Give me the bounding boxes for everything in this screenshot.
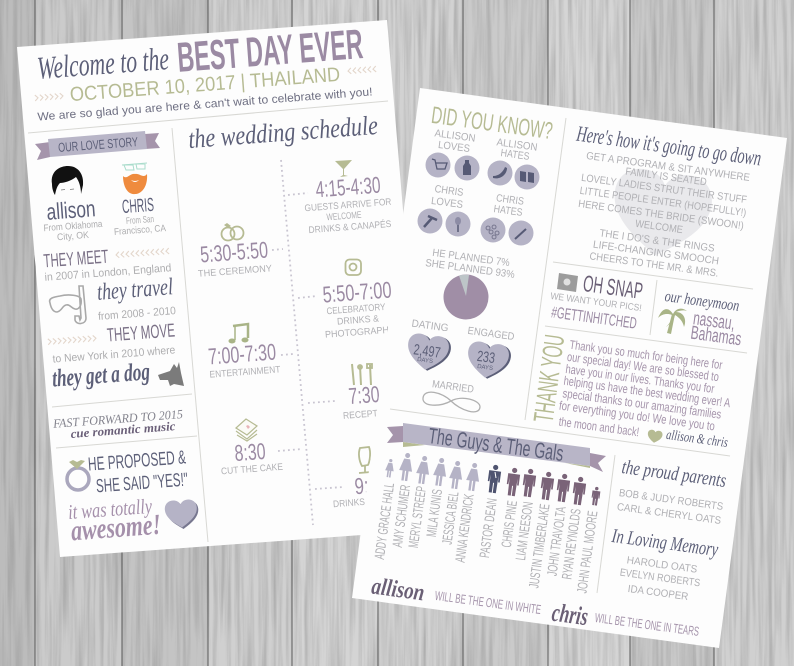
icon: heart bbox=[164, 499, 200, 530]
groomsmen pictograms bbox=[505, 467, 601, 506]
schedule item: 7:30 reception: 7:30 bbox=[348, 381, 380, 409]
chris loves: LOVES bbox=[430, 195, 464, 211]
schedule item: 8:30 cut the cake: CUT THE CAKE bbox=[221, 462, 283, 477]
engaged heart: ENGAGED bbox=[467, 325, 515, 343]
fast forward: FAST FORWARD TO 2015 bbox=[52, 407, 183, 431]
icon: groom glasses and beard bbox=[122, 163, 147, 194]
schedule item: 7:00-7:30 bbox=[207, 324, 293, 381]
thank you note: Thank you so much for being here for bbox=[569, 338, 723, 372]
thank you note: for everything you do! We love you to bbox=[558, 399, 716, 433]
allison hates: HATES bbox=[500, 147, 530, 163]
schedule item: 5:30-5:50 bbox=[198, 223, 283, 280]
planned percentages: SHE PLANNED 93% bbox=[425, 257, 515, 281]
heading: did you know: DID YOU KNOW? bbox=[430, 102, 554, 145]
married infinity: MARRIED bbox=[431, 378, 475, 396]
date and location: OCTOBER 10, 2017 | THAILAND bbox=[69, 64, 341, 106]
schedule item: 7:00-7:30: 7:00-7:30 bbox=[207, 338, 277, 370]
order of ceremony list bbox=[577, 150, 751, 280]
heading: welcome to the: Welcome to the bbox=[36, 40, 170, 86]
cue romantic music: cue romantic music bbox=[70, 419, 176, 441]
wedding party names: JOHN TRAVOLTA bbox=[544, 505, 569, 577]
in 2007: in 2007 in London, England bbox=[44, 262, 172, 284]
chevrons bbox=[116, 248, 169, 258]
it was totally awesome bbox=[67, 494, 162, 547]
bride name: City, OK bbox=[57, 230, 90, 243]
they travel: they travel bbox=[96, 274, 174, 306]
thank you note: helping us have the best wedding ever! A bbox=[563, 374, 732, 410]
schedule item: 9:00 drinks: 9:00 bbox=[354, 471, 388, 499]
groom name: Francisco, CA bbox=[114, 223, 167, 238]
schedule item: 7:30 reception: RECEPTION bbox=[343, 407, 393, 422]
dating heart: 2,497 bbox=[412, 341, 442, 362]
icon: palm tree bbox=[658, 309, 687, 334]
order of ceremony list: CHEERS TO THE MR. & MRS. bbox=[589, 250, 719, 280]
chris hates: HATES bbox=[493, 203, 523, 219]
schedule item: 7:00-7:30: ENTERTAINMENT bbox=[209, 364, 281, 381]
heading: in loving memory: In Loving Memory bbox=[610, 525, 720, 561]
schedule item: 5:50-7:00: DRINKS & bbox=[337, 313, 380, 328]
thank you note bbox=[558, 338, 732, 439]
chevrons bbox=[48, 335, 96, 345]
allison hates bbox=[488, 136, 540, 190]
wedding party names: AMY SCHUMER bbox=[389, 484, 413, 548]
schedule item: 4:15-4:30: GUESTS ARRIVE FOR bbox=[304, 197, 392, 214]
groom name: From San bbox=[126, 214, 154, 227]
parents names: BOB & JUDY ROBERTS bbox=[618, 487, 724, 513]
icon: faint heart bbox=[607, 165, 715, 262]
schedule item: 4:15-4:30 bbox=[288, 160, 392, 236]
wedding party names: ADDY GRACE HALL bbox=[371, 482, 397, 560]
wedding party names: RYAN REYNOLDS bbox=[558, 508, 584, 580]
order of ceremony list: LIFE-CHANGING SMOOCH bbox=[592, 239, 720, 267]
chris footer: chris bbox=[550, 598, 590, 631]
dating heart bbox=[405, 318, 452, 374]
we want your pics: WE WANT YOUR PICS! bbox=[550, 291, 642, 314]
bride name: allison bbox=[46, 195, 96, 225]
ribbon: the guys and the gals: The Guys & The Gals bbox=[427, 423, 565, 466]
schedule item: 4:15-4:30: 4:15-4:30 bbox=[315, 172, 381, 202]
bride name: From Oklahoma bbox=[43, 219, 103, 234]
parents names: CARL & CHERYL OATS bbox=[616, 501, 722, 527]
thank you heading: THANK YOU bbox=[528, 333, 570, 424]
chris loves: CHRIS bbox=[434, 183, 464, 199]
heading: the proud parents: the proud parents bbox=[621, 456, 728, 492]
wedding party names: JUSTIN TIMBERLAKE bbox=[525, 503, 553, 589]
wedding party names: JOHN PAUL MOORE bbox=[574, 510, 600, 594]
planned percentages bbox=[425, 247, 515, 281]
wedding party names: CHRIS PINE bbox=[498, 500, 520, 548]
thank you note: our special day! We are so blessed to bbox=[566, 350, 720, 384]
schedule item: 5:50-7:00: 5:50-7:00 bbox=[322, 276, 392, 308]
icon: ring bbox=[67, 460, 89, 490]
groom name: CHRIS bbox=[121, 195, 155, 218]
icon: small green heart bbox=[647, 429, 663, 444]
ribbon: our love story bbox=[35, 131, 160, 160]
chris loves bbox=[418, 183, 470, 236]
wedding party names: MILA KUNIS bbox=[423, 488, 445, 538]
wedding party names: JESSICA BIEL bbox=[439, 491, 462, 545]
icon: snorkel bbox=[50, 286, 86, 324]
pie chart bbox=[444, 274, 488, 320]
bride name bbox=[43, 195, 103, 243]
schedule item: 9:00 drinks bbox=[315, 447, 388, 510]
chris hates bbox=[480, 192, 534, 246]
panel: right page, wedding program back bbox=[352, 88, 787, 648]
order of ceremony list: WELCOME bbox=[634, 218, 684, 236]
chevrons left bbox=[35, 93, 63, 101]
engaged heart: DAYS bbox=[477, 364, 493, 372]
allison footer: allison bbox=[370, 574, 426, 606]
bridesmaids pictograms bbox=[384, 452, 481, 492]
they get a dog: they get a dog bbox=[51, 358, 151, 393]
schedule item: 5:30-5:50: THE CEREMONY bbox=[198, 263, 273, 280]
he proposed: HE PROPOSED & bbox=[87, 447, 187, 476]
he proposed bbox=[87, 447, 189, 497]
schedule item: 5:50-7:00: CELEBRATORY bbox=[326, 302, 386, 317]
wedding party names: MERYL STREEP bbox=[405, 485, 429, 549]
schedule item: 7:30 reception bbox=[308, 364, 393, 422]
schedule item: 8:30 cut the cake: 8:30 bbox=[234, 438, 266, 466]
groom pictogram bbox=[486, 464, 502, 494]
they move: THEY MOVE bbox=[106, 320, 176, 347]
planned percentages: HE PLANNED 7% bbox=[432, 247, 510, 269]
order of ceremony list: GET A PROGRAM & SIT ANYWHERE bbox=[585, 150, 751, 184]
hashtag: #GETTINHITCHED bbox=[550, 304, 638, 333]
icon: camera bbox=[557, 273, 578, 292]
icon: dog bbox=[158, 362, 184, 386]
they meet: THEY MEET bbox=[43, 247, 109, 272]
order of ceremony list: THE I DO'S & THE RINGS bbox=[599, 227, 715, 255]
memorial names: EVELYN ROBERTS bbox=[619, 567, 701, 589]
nassau bahamas bbox=[689, 308, 743, 350]
married infinity bbox=[423, 378, 480, 412]
it was totally awesome: it was totally bbox=[67, 494, 153, 524]
wedding party names: ANNA KENDRICK bbox=[452, 493, 477, 563]
engaged heart bbox=[465, 325, 515, 382]
wedding party names: PASTOR DEAN bbox=[476, 497, 500, 559]
to new york: to New York in 2010 where bbox=[52, 344, 176, 366]
heading: the wedding schedule: the wedding schedule bbox=[187, 110, 379, 154]
engaged heart: 233 bbox=[476, 348, 496, 367]
memorial names: HAROLD OATS bbox=[626, 554, 698, 576]
chevrons right bbox=[348, 66, 376, 74]
thank you note: the moon and back! bbox=[558, 415, 640, 439]
order of ceremony list: LITTLE PEOPLE ENTER (HOPEFULLY!) bbox=[579, 185, 747, 219]
oh snap: OH SNAP bbox=[582, 270, 644, 304]
memorial names bbox=[619, 554, 701, 603]
schedule item: 5:50-7:00 bbox=[298, 260, 396, 341]
it was totally awesome: awesome! bbox=[70, 509, 162, 547]
wedding party names: LIAM NEESON bbox=[512, 501, 536, 561]
chris hates: CHRIS bbox=[495, 192, 525, 208]
allison hates: ALLISON bbox=[496, 136, 538, 154]
schedule item: 4:15-4:30: DRINKS & CANAPÉS bbox=[308, 219, 392, 236]
order of ceremony list: HERE COMES THE BRIDE (SWOON!) bbox=[577, 198, 745, 232]
icon: bride hair bbox=[52, 166, 83, 195]
chris footer bbox=[550, 598, 700, 639]
allison footer bbox=[370, 574, 542, 617]
allison footer: WILL BE THE ONE IN WHITE bbox=[434, 588, 542, 617]
from 2008: from 2008 - 2010 bbox=[98, 305, 176, 323]
schedule item: 9:00 drinks: DRINKS bbox=[333, 497, 365, 510]
panel: left page, wedding program front bbox=[17, 20, 430, 557]
dating heart: DAYS bbox=[417, 357, 433, 365]
thank you note: special thanks to our amazing families bbox=[562, 386, 722, 422]
schedule item: 5:30-5:50: 5:30-5:50 bbox=[199, 236, 269, 268]
our honeymoon: our honeymoon bbox=[664, 288, 740, 315]
nassau bahamas: Bahamas bbox=[689, 323, 743, 350]
ribbon: our love story: OUR LOVE STORY bbox=[58, 134, 139, 155]
allison loves bbox=[426, 127, 480, 180]
allison loves: LOVES bbox=[437, 139, 471, 155]
he proposed: SHE SAID "YES!" bbox=[95, 470, 189, 497]
order of ceremony list: FAMILY IS SEATED bbox=[625, 166, 708, 188]
schedule item: 4:15-4:30: WELCOME bbox=[326, 210, 362, 223]
allison loves: ALLISON bbox=[434, 127, 476, 145]
parents names bbox=[616, 487, 724, 527]
welcome sentence: We are so glad you are here & can't wait to celebrate with you! bbox=[37, 86, 373, 124]
ribbon: the guys and the gals bbox=[387, 423, 606, 472]
heading: best day ever: BEST DAY EVER bbox=[175, 20, 365, 81]
memorial names: IDA COOPER bbox=[627, 583, 689, 603]
schedule item: 8:30 cut the cake bbox=[221, 419, 302, 477]
order of ceremony list: LOVELY LADIES STRUT THEIR STUFF bbox=[580, 172, 748, 206]
signature: allison & chris bbox=[665, 428, 729, 451]
thank you note: have you in our lives. Thanks you for bbox=[565, 362, 715, 396]
nassau bahamas: nassau, bbox=[692, 308, 736, 335]
groom name bbox=[114, 195, 167, 238]
schedule item: 5:50-7:00: PHOTOGRAPHY bbox=[325, 324, 396, 341]
chris footer: WILL BE THE ONE IN TEARS bbox=[594, 610, 700, 639]
wedding party names bbox=[371, 482, 600, 594]
dating heart: DATING bbox=[411, 318, 449, 334]
